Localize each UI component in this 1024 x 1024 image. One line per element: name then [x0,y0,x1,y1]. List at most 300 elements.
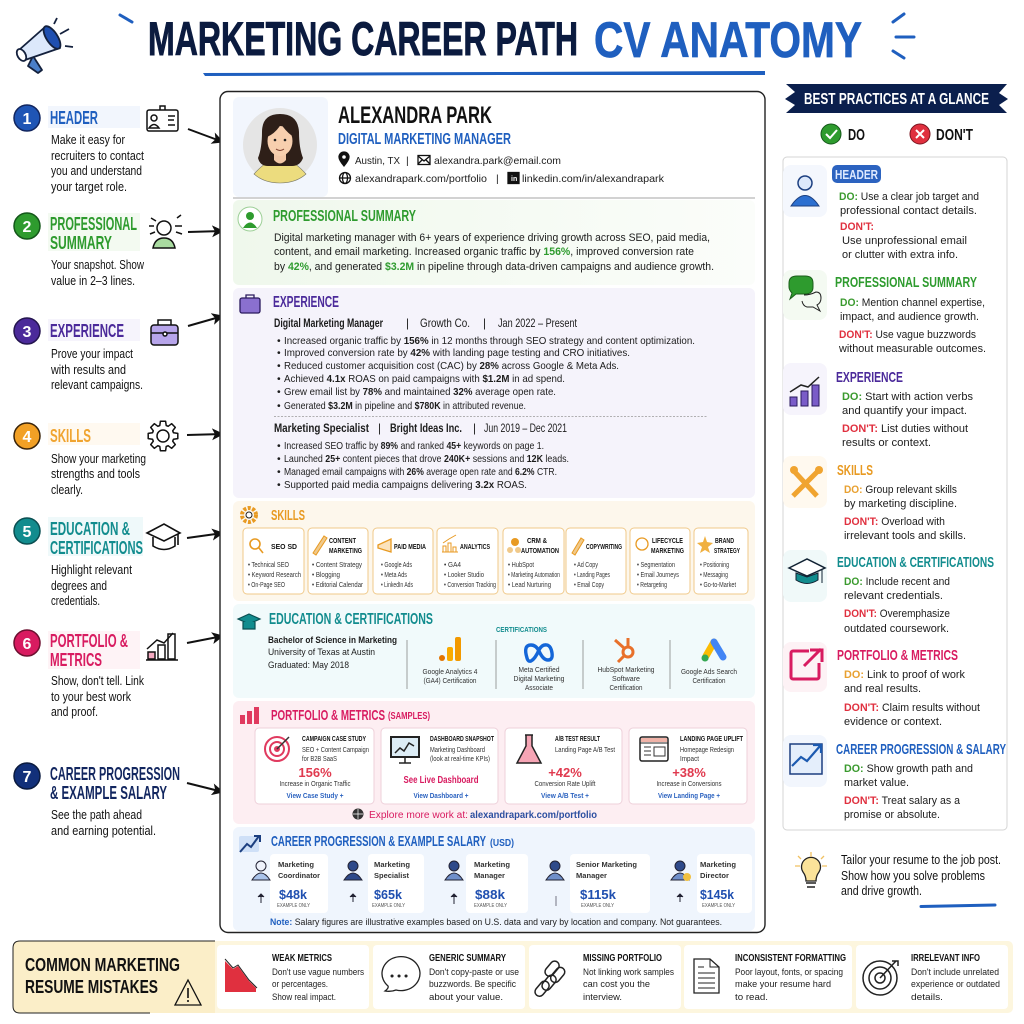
left column: step 4 skills: SKILLS [50,426,91,446]
panel: CV header: linkedin.com/in/alexandrapark [522,174,665,185]
panel: education and certifications: Software [612,674,640,683]
skill card: brand strategy: BRAND [715,538,734,545]
job: marketing specialist: Launched 25+ content pieces that drove 240K+ sessions and 12K leads. [284,454,569,465]
panel: education and certifications: Associate [525,683,553,692]
title underline [203,71,765,76]
practice: portfolio [783,642,981,728]
skill card: crm [503,528,564,594]
icon: skills gear [242,508,256,522]
mistake: irrelevant info: Don't include unrelated [911,967,999,977]
panel: CV header: | [406,156,409,167]
job: digital marketing manager: • [277,374,281,385]
role: marketing specialist: EXAMPLE ONLY [372,903,406,909]
legend: do and don't: DO [848,127,865,144]
practice: skills: SKILLS [837,462,873,479]
job: marketing specialist: | [473,422,476,435]
mistake: missing portfolio: MISSING PORTFOLIO [583,953,662,964]
practice: experience [783,363,973,449]
left column: step 2 summary: Your snapshot. Show [51,257,144,272]
card: dashboard snapshot: DASHBOARD SNAPSHOT [430,736,495,743]
arrow: portfolio [187,636,223,643]
panel: professional summary: PROFESSIONAL SUMMARY [273,208,416,225]
card: a/b test result: +42% [548,765,582,780]
practice: skills: by marketing discipline. [844,498,957,510]
mistake: irrelevant info [856,945,1008,1009]
card: a/b test result: View A/B Test + [541,793,589,800]
practice: portfolio: and real results. [844,683,921,695]
practice: professional summary: DO: Mention channel expertise, [840,297,985,309]
panel: CV header: DIGITAL MARKETING MANAGER [338,131,511,148]
skill card: lifecycle marketing: LIFECYCLE [652,538,683,545]
practice: header: or clutter with extra info. [842,249,958,261]
job: digital marketing manager: Achieved 4.1x ROAS on paid campaigns with $1.2M in ad spend. [284,374,565,385]
banner: best practices [785,84,1008,113]
panel: professional summary: Digital marketing manager with 6+ years of experience driving growth across SEO, paid media, [274,232,710,244]
job: marketing specialist: Jun 2019 – Dec 2021 [484,422,567,435]
card: campaign case study: CAMPAIGN CASE STUDY [302,736,366,743]
job: digital marketing manager: Reduced customer acquisition cost (CAC) by 28% across Google & Meta Ads. [284,361,619,372]
legend: do and don't: DON'T [936,127,973,144]
panel: CV header: Austin, TX [355,156,400,167]
role: marketing specialist: Specialist [374,871,409,880]
panel: professional summary [233,200,755,285]
skill card: content marketing: CONTENT [329,538,357,545]
left column: step 6 portfolio [14,630,178,719]
icon: career chart [239,836,260,852]
card: a/b test result: A/B TEST RESULT [555,736,601,743]
job: digital marketing manager: • [277,387,281,398]
card: campaign case study: Increase in Organic Traffic [280,781,351,788]
title: CV ANATOMY [594,12,862,68]
legend: do and don't [821,124,973,144]
card: landing page uplift: Homepage Redesign [680,747,734,754]
title: MARKETING CAREER PATH [148,12,578,65]
left column: step 5 education: Highlight relevant [51,562,132,577]
arrow: career [187,783,223,792]
practice: skills: DO: Group relevant skills [844,484,957,496]
practice: experience: DON'T: List duties without [842,423,969,435]
left column: step 7 career [14,763,180,838]
panel: education and certifications [233,604,755,698]
tip: tailor your resume: Show how you solve problems [841,868,985,883]
skill card: SEO: SEO SD [271,544,297,551]
job: digital marketing manager: • [277,401,281,412]
role: marketing specialist: $65k [374,887,403,902]
icon: portfolio bars [240,707,259,724]
skill card: brand strategy: STRATEGY [714,548,740,555]
card: landing page uplift [629,728,747,804]
panel: CV header: alexandrapark.com/portfolio [355,174,487,185]
skill card: copywriting: • Email Copy [574,582,604,589]
left column: step 5 education: 5 [23,524,32,541]
left column: step 6 portfolio: 6 [23,636,32,653]
role: marketing manager [445,854,528,913]
left column: step 7 career: & EXAMPLE SALARY [50,783,167,803]
skill card: paid media: • LinkedIn Ads [381,582,413,589]
job: digital marketing manager: Jan 2022 – Present [498,317,578,330]
practice: professional summary: impact, and audience growth. [840,311,979,323]
card: dashboard snapshot: Marketing Dashboard [430,747,485,754]
panel: portfolio and metrics: (SAMPLES) [388,711,430,722]
role: marketing director: Director [700,871,729,880]
tip: tailor your resume [795,852,1001,906]
panel: CV document [220,92,765,932]
skill card: content marketing: • Blogging [312,572,340,579]
practice: header: DON'T: [840,221,874,233]
skill card: brand strategy: • Messaging [700,572,728,579]
role: marketing coordinator: EXAMPLE ONLY [277,903,311,909]
panel: education and certifications: HubSpot Marketing [598,665,654,674]
practice: skills: DON'T: Overload with [844,516,945,528]
mistake: missing portfolio: Not linking work samples [583,967,674,977]
skill card: content marketing: • Content Strategy [312,562,362,569]
role: marketing coordinator: $48k [279,887,308,902]
practice: career progression: market value. [844,777,909,789]
skill card: crm: AUTOMATION [521,548,559,555]
left column: step 4 skills: clearly. [51,482,83,497]
skill card: content marketing [308,528,368,594]
mistake: weak metrics: Show real impact. [272,992,336,1002]
tip: tailor your resume: and drive growth. [841,883,922,898]
arrow: education [187,533,223,538]
panel: portfolio and metrics [233,701,755,824]
job: digital marketing manager: Increased organic traffic by 156% in 12 months through SEO strategy and content optimization. [284,336,695,347]
panel: education and certifications: Google Ads Search [681,667,737,676]
card: a/b test result: Conversion Rate Uplift [534,781,596,788]
card: campaign case study: 156% [298,765,332,780]
skill card: brand strategy [694,528,748,594]
skill card: paid media: • Meta Ads [381,572,407,579]
left column: step 2 summary [14,213,182,288]
role: marketing director: Marketing [700,860,736,869]
job: digital marketing manager: Growth Co. [420,317,470,330]
left column: step 2 summary: 2 [23,219,32,236]
panel: education and certifications: Digital Marketing [514,674,564,683]
icon: HubSpot logo [615,638,633,662]
role: marketing coordinator [252,854,328,913]
skill card: content marketing: MARKETING [329,548,362,555]
left column: step 1 header [14,105,178,194]
job: marketing specialist: • [277,441,281,452]
left column: step 4 skills: strengths and tools [51,466,140,481]
panel: common mistakes: COMMON MARKETING [25,955,180,975]
skill card: crm: • HubSpot [508,562,534,569]
icon: Google Ads logo [705,642,723,658]
left column: step 4 skills: Show your marketing [51,451,146,466]
left column: step 6 portfolio: Show, don't tell. Link [51,673,144,688]
left column: step 6 portfolio: to your best work [51,689,131,704]
icon: warning triangle [175,980,201,1005]
card: dashboard snapshot: View Dashboard + [414,793,468,800]
panel: CV header: alexandra.park@email.com [434,156,561,167]
job: digital marketing manager: | [406,317,409,330]
job: marketing specialist: Supported paid media campaigns delivering 3.2x ROAS. [284,480,527,491]
job: marketing specialist: • [277,454,281,465]
panel: education and certifications: Bachelor of Science in Marketing [268,635,397,646]
mistake: missing portfolio: interview. [583,992,622,1002]
card: landing page uplift: LANDING PAGE UPLIFT [680,736,744,743]
panel: education and certifications: Certification [610,683,642,692]
job: digital marketing manager [274,317,695,412]
panel: CV header: | [496,174,499,185]
practice: career progression: DON'T: Treat salary as a [844,795,961,807]
mistake: inconsistent formatting: to read. [735,992,768,1002]
mistake: weak metrics: or percentages. [272,979,328,989]
practice: professional summary [783,270,986,355]
role: senior marketing manager: $115k [580,887,617,902]
role: marketing director: EXAMPLE ONLY [702,903,736,909]
left column: step 4 skills: 4 [23,429,32,446]
mistake: weak metrics [217,945,369,1009]
card: a/b test result [505,728,622,804]
card: a/b test result: Landing Page A/B Test [555,747,615,754]
job: marketing specialist: | [378,422,381,435]
practice: header: professional contact details. [840,205,977,217]
left column: step 3 experience: EXPERIENCE [50,321,124,341]
card: dashboard snapshot: See Live Dashboard [404,775,478,786]
mistake: weak metrics: Don't use vague numbers [272,967,364,977]
skill card: analytics: • Conversion Tracking [444,582,496,589]
card: campaign case study: SEO + Content Campaign [302,747,369,754]
icon: summary person [238,207,262,231]
job: digital marketing manager: • [277,361,281,372]
mistake: irrelevant info: details. [911,992,943,1002]
job: digital marketing manager: Generated $3.2M in pipeline and $780K in attributed revenue. [284,401,526,412]
left column: step 7 career: and earning potential. [51,823,156,838]
icon: Google Analytics logo [439,637,461,661]
icon: title accent strokes [120,14,914,58]
mistake: irrelevant info: IRRELEVANT INFO [911,953,980,964]
left column: step 5 education: EDUCATION & [50,519,130,539]
panel: CV header: ALEXANDRA PARK [338,102,492,129]
panel: career progression: CAREER PROGRESSION & EXAMPLE SALARY [271,833,486,850]
card: landing page uplift: View Landing Page + [658,793,720,800]
practice: header: DO: Use a clear job target and [839,191,979,203]
left column: step 7 career: 7 [23,769,32,786]
job: digital marketing manager: | [483,317,486,330]
skill card: crm: • Lead Nurturing [508,582,551,589]
job: digital marketing manager: Improved conversion rate by 42% with landing page testing and CRO initiatives. [284,348,630,359]
left column: step 3 experience: relevant campaigns. [51,377,143,392]
left column: step 6 portfolio: and proof. [51,704,98,719]
mistake: weak metrics: WEAK METRICS [272,953,332,964]
panel: common mistakes [13,941,1013,1013]
skill card: SEO: • Keyword Research [248,572,301,579]
role: marketing manager: EXAMPLE ONLY [474,903,508,909]
skill card: SEO [243,528,304,594]
job: marketing specialist: Bright Ideas Inc. [390,422,462,435]
left column: step 5 education [14,517,180,608]
left column: step 2 summary: SUMMARY [50,233,112,253]
practice: education [783,550,994,635]
panel: portfolio and metrics: PORTFOLIO & METRICS [271,707,385,724]
practice: skills [783,456,966,542]
skill card: analytics: • Looker Studio [444,572,484,579]
left column: step 7 career: CAREER PROGRESSION [50,764,180,784]
panel: education and certifications: Meta Certified [518,665,560,674]
skill card: paid media: • Google Ads [381,562,412,569]
left column: step 1 header: recruiters to contact [51,148,144,163]
skill card: paid media: PAID MEDIA [394,544,426,551]
icon: avatar [243,108,317,183]
practice: professional summary: without measurable outcomes. [838,343,986,355]
job: digital marketing manager: Grew email list by 78% and maintained 32% average open rate. [284,387,556,398]
portfolio link row: alexandrapark.com/portfolio [470,810,597,821]
skill card: analytics [437,528,498,594]
icon: contact glyphs [339,152,519,184]
role: marketing coordinator: Marketing [278,860,314,869]
portfolio link row [352,808,597,821]
panel: CV header: in [511,176,517,183]
skill card: lifecycle marketing: • Retargeting [637,582,667,589]
left column: step 1 header: your target role. [51,179,127,194]
arrow: skills [187,434,223,435]
practice: experience: results or context. [842,437,931,449]
practice: experience: EXPERIENCE [836,369,903,386]
job: digital marketing manager: • [277,348,281,359]
practice: experience: and quantify your impact. [842,405,967,417]
practice: career progression: promise or absolute. [844,809,940,821]
practice: header [783,165,979,261]
practice: education: outdated coursework. [844,623,949,635]
card: landing page uplift: Increase in Conversions [656,781,722,788]
icon: graduation cap [238,614,260,629]
job: marketing specialist: • [277,467,281,478]
card: dashboard snapshot [381,728,498,804]
icon: briefcase [240,295,260,313]
mistake: inconsistent formatting: make your resume hard [735,979,831,989]
role: marketing director: $145k [700,887,735,902]
skill card: brand strategy: • Positioning [700,562,729,569]
arrow: experience [188,316,223,326]
role: marketing specialist [344,854,424,913]
left column: step 3 experience: 3 [23,324,32,341]
panel: skills: SKILLS [271,507,305,524]
role: marketing coordinator: Coordinator [278,871,320,880]
arrow: summary [188,231,223,232]
skill card: lifecycle marketing [630,528,690,594]
left column: step 6 portfolio: METRICS [50,650,102,670]
job: marketing specialist: • [277,480,281,491]
practice: experience: DO: Start with action verbs [842,391,973,403]
left column: step 3 experience [14,318,178,392]
role: senior marketing manager: Manager [576,871,607,880]
job: digital marketing manager: • [277,336,281,347]
left column: step 3 experience: with results and [50,362,126,377]
panel: education and certifications: EDUCATION & CERTIFICATIONS [269,611,433,628]
left column: step 7 career: See the path ahead [51,807,142,822]
role: marketing manager: Marketing [474,860,510,869]
left column: step 1 header: Make it easy for [51,132,126,147]
mistake: inconsistent formatting: INCONSISTENT FORMATTING [735,953,846,964]
job: digital marketing manager: Digital Marketing Manager [274,317,383,330]
panel: CV header [233,97,665,197]
skill card: SEO: • Technical SEO [248,562,289,569]
skill card: paid media [373,528,433,594]
skill card: brand strategy: • Go-to-Market [700,582,736,589]
mistake: generic summary: about your value. [429,992,503,1002]
portfolio link row: Explore more work at: [369,810,468,821]
practice: education: relevant credentials. [844,590,943,602]
practice: portfolio: evidence or context. [844,716,942,728]
card: landing page uplift: +38% [672,765,706,780]
mistake: generic summary: Don't copy-paste or use [429,967,519,977]
mistake: generic summary: buzzwords. Be specific [429,979,516,989]
role: marketing director [671,854,752,913]
skill card: content marketing: • Editorial Calendar [312,582,364,589]
panel: education and certifications: University of Texas at Austin [268,647,375,658]
salary note: Note: Salary figures are illustrative examples based on U.S. data and vary by location and company. Not guarantees. [270,917,722,928]
panel: professional summary: by 42%, and generated $3.2M in pipeline through data-driven campaigns and audience growth. [274,261,714,273]
icon: megaphone [15,18,73,73]
panel: education and certifications: CERTIFICATIONS [496,627,547,634]
panel: best practices list [783,157,1007,830]
left column: step 5 education: credentials. [51,593,100,608]
left column: step 2 summary: value in 2–3 lines. [51,273,135,288]
left column: step 5 education: degrees and [51,578,107,593]
practice: portfolio: DON'T: Claim results without [844,702,981,714]
card: landing page uplift: Impact [680,756,699,763]
skill card: analytics: ANALYTICS [460,544,490,551]
role: marketing specialist: Marketing [374,860,410,869]
panel: education and certifications: (GA4) Certification [424,676,476,685]
mistake: irrelevant info: experience or outdated [911,979,1000,989]
role: senior marketing manager [546,854,650,913]
panel: education and certifications: Google Analytics 4 [422,667,478,676]
mistake: generic summary [373,945,525,1009]
card: campaign case study: for B2B SaaS [302,756,337,763]
practice: education: DON'T: Overemphasize [844,608,950,620]
job: marketing specialist: Increased SEO traffic by 89% and ranked 45+ keywords on page 1. [284,441,544,452]
role: senior marketing manager: EXAMPLE ONLY [581,903,615,909]
left column: step 2 summary: PROFESSIONAL [50,214,137,234]
card: campaign case study: View Case Study + [286,793,344,800]
role: senior marketing manager: Senior Marketing [576,860,637,869]
panel: professional summary: content, and email marketing. Increased organic traffic by 156%, improved conversion rate [274,246,694,258]
left column: step 1 header: 1 [23,111,32,128]
panel: common mistakes: RESUME MISTAKES [25,977,158,997]
skill card: lifecycle marketing: • Segmentation [637,562,675,569]
role: marketing manager: $88k [475,887,506,902]
role: marketing manager: Manager [474,871,505,880]
mistake: missing portfolio: can cost you the [583,979,650,989]
job: marketing specialist: Managed email campaigns with 26% average open rate and 6.2% CTR. [284,467,557,478]
left column: step 3 experience: Prove your impact [51,346,133,361]
skill card: copywriting: • Landing Pages [574,572,610,579]
panel: career progression: (USD) [490,838,514,849]
left column: step 5 education: CERTIFICATIONS [50,538,143,558]
skill card: analytics: • GA4 [444,562,461,569]
left column: step 1 header: HEADER [50,108,98,128]
left column: step 4 skills [14,421,178,497]
panel: skills [233,501,755,601]
panel: experience [233,288,755,498]
skill card: crm: CRM & [527,538,547,545]
card: dashboard snapshot: (look at real-time KPIs) [430,756,490,763]
icon: Meta logo [526,645,552,661]
skill card: copywriting: COPYWRITING [586,544,622,551]
practice: career progression: DO: Show growth path and [844,763,973,775]
skill card: crm: • Marketing Automation [508,572,560,579]
skill card: lifecycle marketing: MARKETING [651,548,684,555]
arrow: header [188,129,223,142]
panel: education and certifications: Graduated: May 2018 [268,660,349,671]
panel: experience: EXPERIENCE [273,294,339,311]
practice: header: HEADER [835,167,878,182]
skill card: copywriting [566,528,626,594]
skill card: copywriting: • Ad Copy [574,562,598,569]
mistake: missing portfolio [529,945,681,1009]
